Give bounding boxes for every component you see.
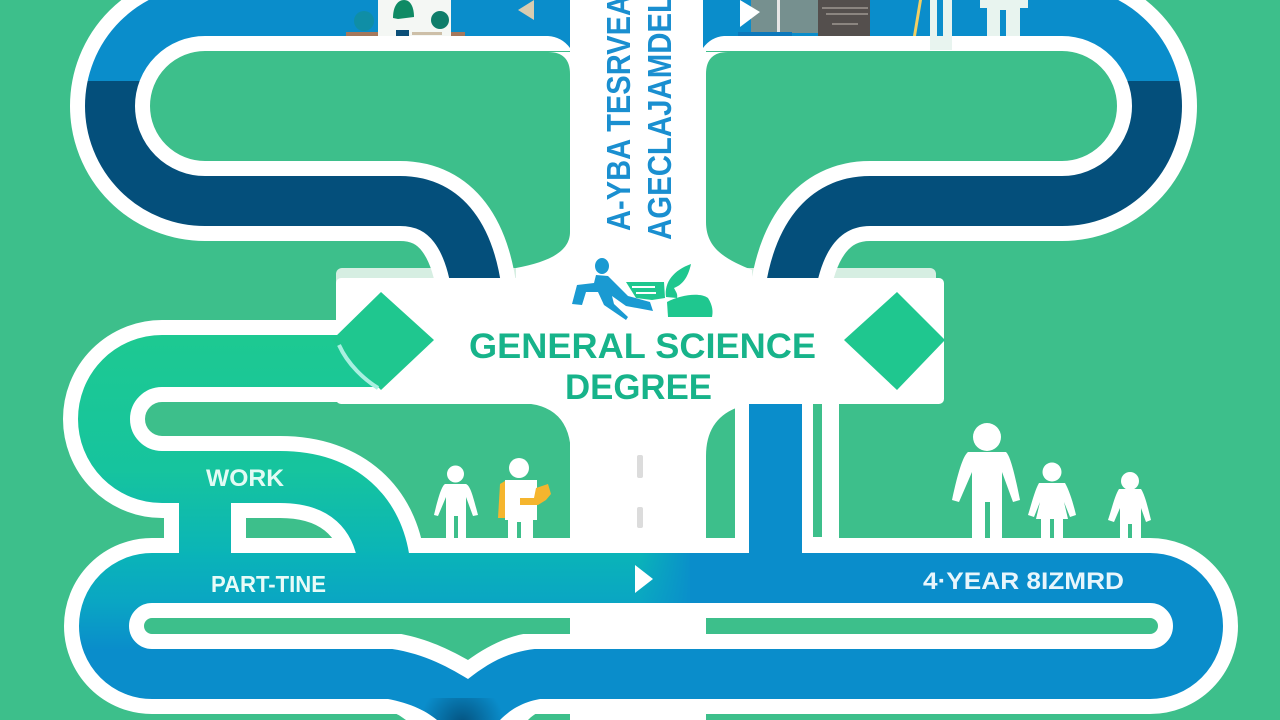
arrow: top right <box>740 0 760 27</box>
title: GENERAL SCIENCE <box>469 327 816 366</box>
work label: WORK <box>206 465 285 492</box>
card top edge strip <box>336 268 936 292</box>
scene: classroom <box>346 0 465 36</box>
scene: building <box>738 0 870 36</box>
green V notch <box>392 632 532 660</box>
figures at top right <box>913 0 1028 50</box>
bottom road blue <box>104 578 1198 674</box>
diamond left <box>332 292 434 390</box>
branch white lower fork <box>370 708 560 720</box>
vertical blue connector <box>735 404 839 556</box>
person right medium <box>1028 462 1076 552</box>
bottom road fork <box>382 698 548 720</box>
white outline of work road <box>104 361 384 562</box>
title: DEGREE <box>565 368 712 407</box>
top right road <box>695 11 1157 292</box>
arrow: top left <box>518 0 534 20</box>
central white column <box>516 0 752 720</box>
diamond right <box>844 292 945 390</box>
person left one <box>434 466 478 552</box>
part-time label: PART-TINE <box>211 571 326 597</box>
white V notch <box>385 648 545 679</box>
title <box>469 327 816 407</box>
four year label: 4·YEAR 8IZMRD <box>923 568 1124 595</box>
road corners by column <box>548 0 724 48</box>
arrow: bottom road <box>635 565 653 593</box>
road colour transition <box>640 553 696 603</box>
white outline of bottom road <box>104 578 1198 674</box>
icon: person with book and plant <box>572 258 713 320</box>
center card <box>336 278 944 404</box>
work road green <box>104 361 384 562</box>
person right small <box>1108 472 1151 552</box>
top left road <box>110 11 580 292</box>
column dashes <box>637 455 643 528</box>
person left two with yellow bag <box>498 458 551 552</box>
person right large <box>952 423 1020 552</box>
